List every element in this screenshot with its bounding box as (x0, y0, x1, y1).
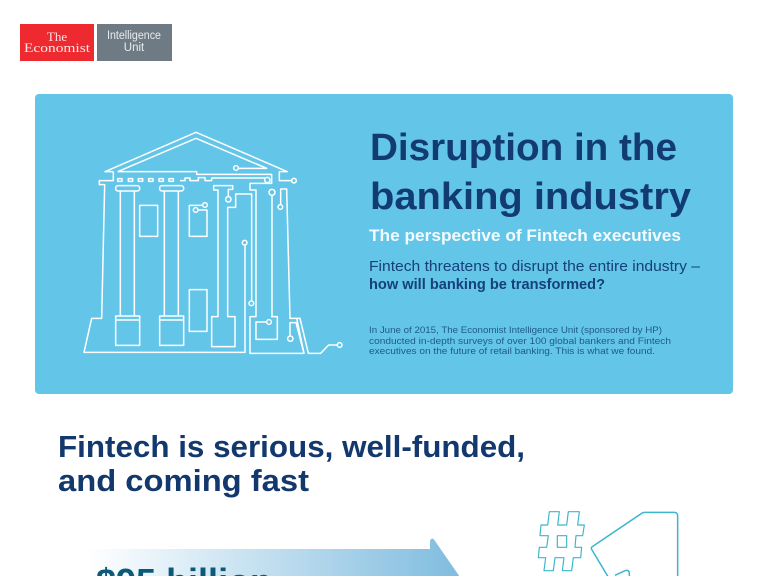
logo: The Economist Intelligence Unit: Unit (124, 42, 145, 54)
text block: question: how will banking be transformed? (369, 277, 605, 293)
arrow: $95 billion (88, 538, 462, 576)
column 1 (116, 186, 140, 345)
text block: question: Fintech threatens to disrupt the entire industry – (369, 259, 701, 275)
title: Disruption in the (370, 127, 677, 169)
logo: The Economist Intelligence Unit (20, 24, 172, 61)
text block: survey note (369, 325, 671, 357)
text block: question (369, 259, 701, 293)
heading: and coming fast (58, 463, 309, 498)
icon: circuit-line bank building (84, 132, 342, 353)
logo: The Economist Intelligence Unit: Intelligence (107, 30, 161, 42)
title (370, 127, 691, 218)
text block: survey note: conducted in-depth surveys of over 100 global bankers and Fintech (369, 336, 671, 347)
logo: The Economist Intelligence Unit: The (47, 29, 67, 44)
title: banking industry (370, 176, 691, 218)
icon: #1 outline (538, 512, 678, 576)
column 4 (256, 189, 277, 339)
text block: survey note: executives on the future of retail banking. This is what we found. (369, 346, 655, 357)
text block: survey note: In June of 2015, The Economist Intelligence Unit (sponsored by HP) (369, 325, 662, 336)
column 3 (212, 186, 254, 347)
heading (58, 429, 525, 498)
panel: hero banner (35, 94, 733, 394)
icon: hash sign (538, 512, 584, 571)
subtitle: The perspective of Fintech executives (369, 226, 681, 245)
logo: The Economist Intelligence Unit: Economist (24, 40, 90, 55)
column 2 (160, 186, 184, 345)
icon: numeral one (591, 512, 678, 576)
heading: Fintech is serious, well-funded, (58, 429, 525, 464)
